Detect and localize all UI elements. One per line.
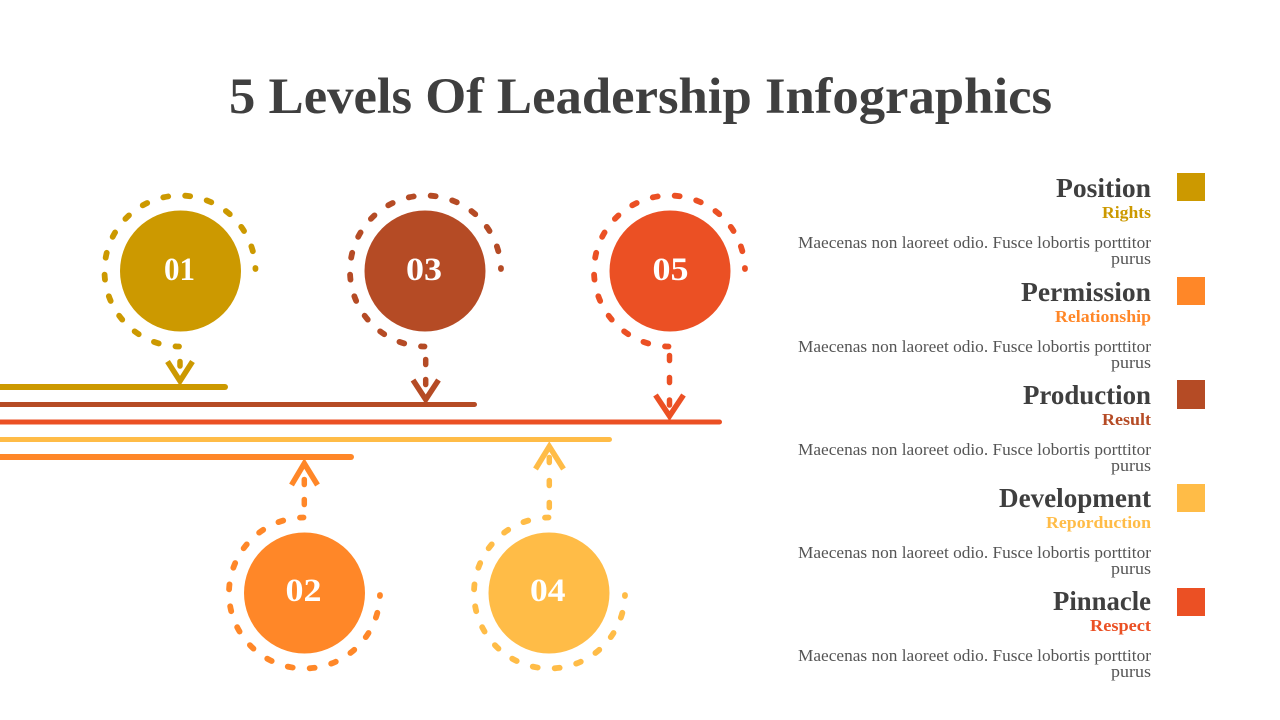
legend: Pinnacle: purus <box>1111 662 1151 681</box>
legend: Permission: Maecenas non laoreet odio. Fusce lobortis porttitor <box>798 337 1151 356</box>
title: 5 Levels Of Leadership Infographics <box>229 69 1052 125</box>
legend: Development: Development <box>999 483 1151 513</box>
legend: Production: purus <box>1111 456 1151 475</box>
level 01 marker: 01 <box>164 252 195 288</box>
level 03 marker: 03 <box>406 252 442 288</box>
legend: Production: Maecenas non laoreet odio. Fusce lobortis porttitor <box>798 440 1151 459</box>
legend: Development <box>798 483 1205 578</box>
timeline bars <box>0 384 722 460</box>
legend: Pinnacle: Respect <box>1090 616 1151 635</box>
legend: Position <box>798 173 1205 268</box>
level 02 marker <box>229 464 380 668</box>
legend: Permission: purus <box>1111 353 1151 372</box>
legend: Pinnacle <box>798 586 1205 681</box>
legend: Position: purus <box>1111 249 1151 268</box>
level 05 marker <box>594 196 745 416</box>
legend: Production: Result <box>1102 410 1151 429</box>
level 05 marker: 05 <box>652 252 688 288</box>
level 02 marker: 02 <box>286 573 322 609</box>
legend: Pinnacle: Pinnacle <box>1053 586 1151 616</box>
legend: Permission <box>798 277 1205 372</box>
level 01 marker <box>104 196 255 381</box>
legend: Production: Production <box>1023 380 1151 410</box>
legend: Production <box>798 380 1205 475</box>
legend: Development: Maecenas non laoreet odio. Fusce lobortis porttitor <box>798 543 1151 562</box>
legend: Permission: Permission <box>1021 277 1151 307</box>
legend: Position: Maecenas non laoreet odio. Fusce lobortis porttitor <box>798 233 1151 252</box>
legend: Pinnacle: Maecenas non laoreet odio. Fusce lobortis porttitor <box>798 646 1151 665</box>
legend: Position: Position <box>1056 173 1151 203</box>
level 03 marker <box>350 196 501 400</box>
legend: Development: purus <box>1111 559 1151 578</box>
legend: Position: Rights <box>1102 203 1151 222</box>
level 04 marker <box>474 446 625 668</box>
level 04 marker: 04 <box>530 573 566 609</box>
legend: Development: Reporduction <box>1046 513 1152 532</box>
legend: Permission: Relationship <box>1055 307 1151 326</box>
